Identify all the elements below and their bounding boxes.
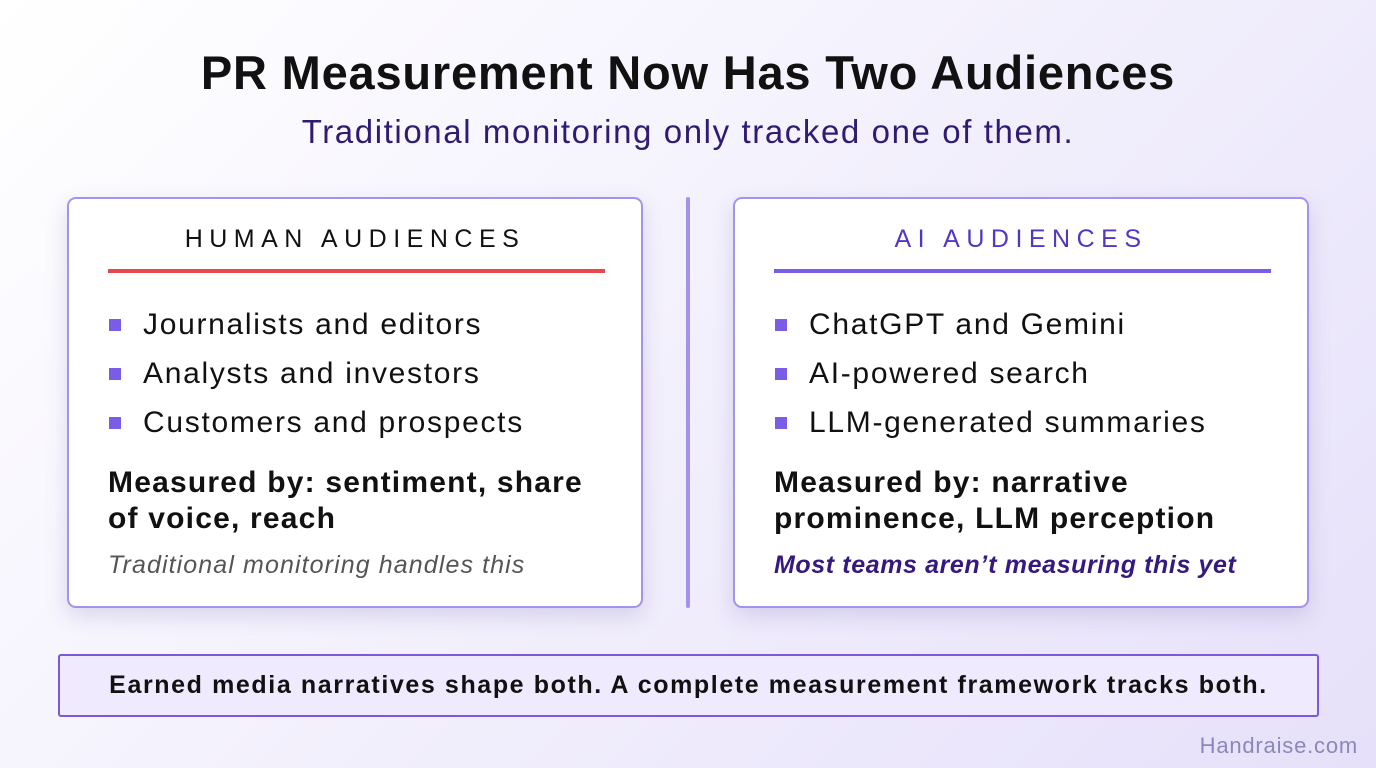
bullet list: human <box>109 308 524 439</box>
bullet list: AI: ChatGPT and Gemini <box>809 308 1126 341</box>
panel: human audiences <box>67 197 643 608</box>
divider <box>686 197 690 608</box>
bullet list: human: Journalists and editors <box>143 308 482 341</box>
subtitle: Traditional monitoring only tracked one of them. <box>302 113 1074 150</box>
bullet list: AI: LLM-generated summaries <box>809 406 1207 439</box>
bottom callout <box>58 654 1319 717</box>
bullet list: AI <box>775 308 1207 439</box>
measured by: human: Measured by: sentiment, share of voice, reach <box>108 466 583 535</box>
title: PR Measurement Now Has Two Audiences <box>201 46 1175 99</box>
heading: human audiences: HUMAN AUDIENCES <box>185 225 525 253</box>
red underline <box>108 269 605 273</box>
bullet list: human: Customers and prospects <box>143 406 524 439</box>
bullet list: human: Analysts and investors <box>143 357 481 390</box>
panel: AI audiences <box>733 197 1309 608</box>
note: human: Traditional monitoring handles this <box>108 551 525 579</box>
heading: AI audiences: AI AUDIENCES <box>894 225 1148 253</box>
measured by: AI: Measured by: narrative prominence, LLM perception <box>774 466 1215 535</box>
note: AI: Most teams aren’t measuring this yet <box>774 551 1236 579</box>
purple underline <box>774 269 1271 273</box>
footer brand: Handraise.com <box>1200 733 1358 758</box>
bullet list: AI: AI-powered search <box>809 357 1090 390</box>
bottom callout: Earned media narratives shape both. A complete measurement framework tracks both. <box>109 671 1268 699</box>
